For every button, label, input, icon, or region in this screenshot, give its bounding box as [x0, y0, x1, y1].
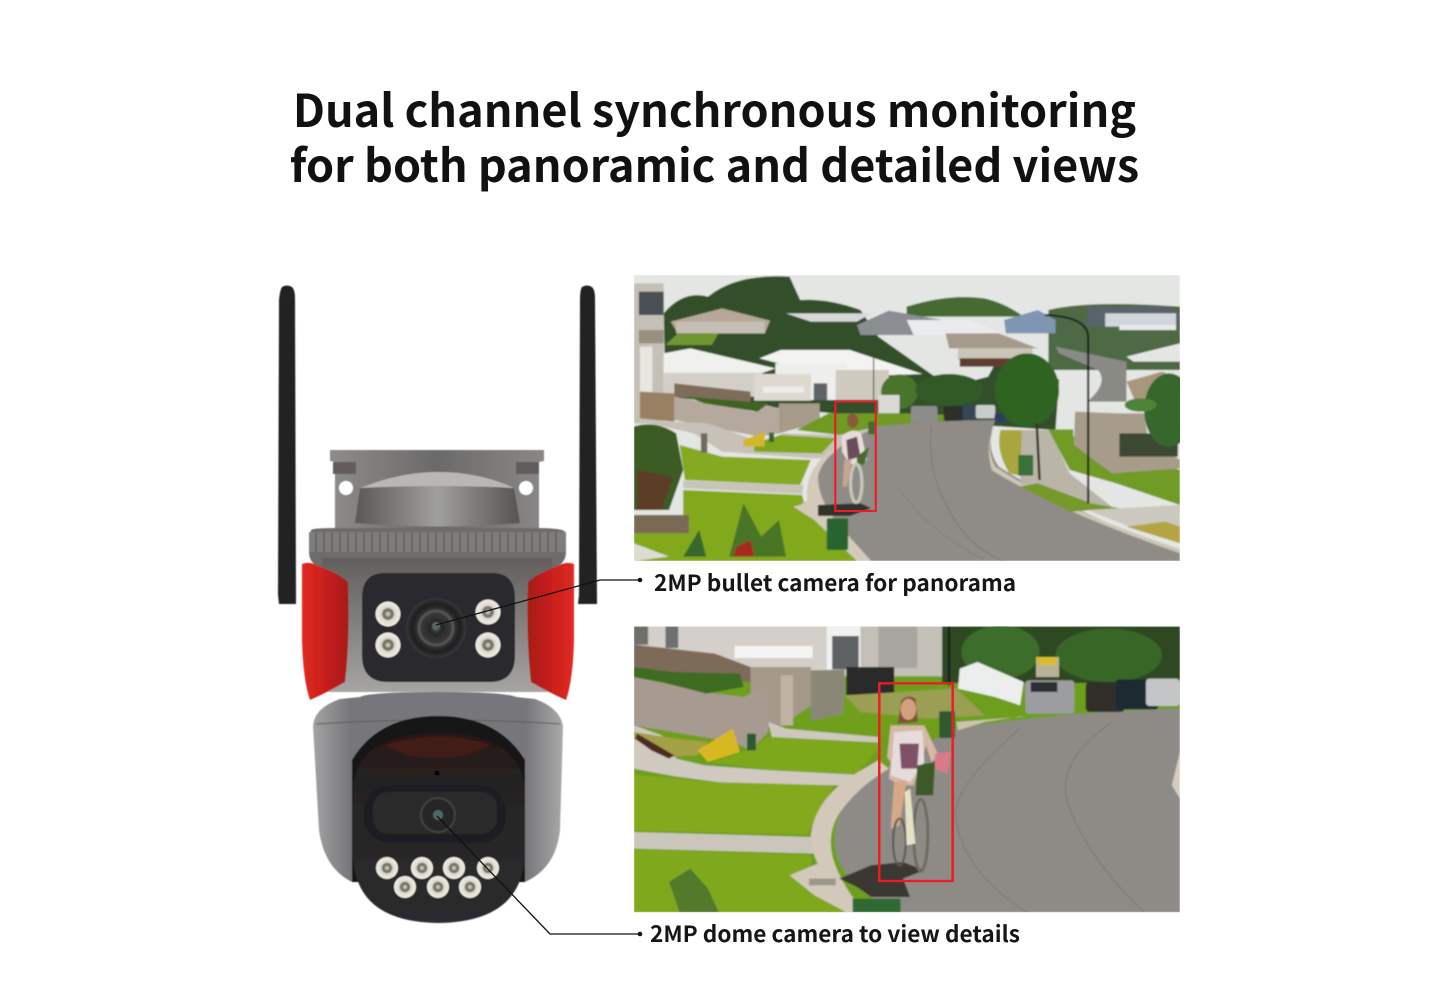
photo: panorama street view [634, 275, 1194, 561]
camera illustration [278, 286, 597, 923]
detection box [879, 683, 953, 881]
brown fence [634, 645, 751, 682]
cars [878, 395, 1006, 423]
bullet camera module [362, 573, 515, 682]
antenna: left [278, 286, 296, 604]
distant hills and trees [907, 297, 1024, 317]
street lamp [1045, 315, 1088, 503]
upper housing [322, 558, 552, 692]
mounting bracket [330, 450, 544, 530]
kerb [793, 450, 871, 561]
mid trees [881, 374, 918, 409]
white van [958, 662, 1024, 705]
right fence [1074, 412, 1180, 473]
lens [421, 798, 455, 832]
photo: detail view [634, 625, 1180, 912]
kerb [790, 760, 889, 912]
lower left lawns and paths [634, 420, 878, 458]
bins [827, 518, 848, 550]
hill lawn mid [796, 412, 946, 436]
mid lawn [712, 737, 882, 774]
road [835, 709, 1180, 912]
ridged ring [309, 528, 566, 570]
bin [939, 711, 955, 738]
LED group [376, 857, 499, 898]
lens [406, 598, 466, 658]
drain and shadow [839, 862, 924, 897]
detection box [835, 402, 876, 511]
LED group [376, 600, 500, 658]
dome cap [355, 472, 520, 526]
title: for both panoramic and detailed views [290, 130, 1139, 195]
label: dome camera: 2MP dome camera to view details [650, 916, 1020, 949]
bushes [635, 734, 674, 759]
right lawns [998, 429, 1023, 476]
far houses [671, 308, 770, 333]
background lawn [842, 697, 846, 715]
road [814, 420, 1180, 561]
foreground plants [634, 424, 683, 510]
title [290, 75, 1139, 195]
white houses [664, 348, 775, 373]
dark gap [352, 716, 525, 882]
retaining wall [634, 677, 768, 750]
left building [634, 283, 664, 423]
cyclist [887, 697, 951, 871]
trees [962, 625, 1040, 679]
dome camera head [353, 733, 525, 923]
rider shadow [818, 503, 871, 516]
cyclist [842, 413, 869, 503]
antenna: right [578, 286, 597, 604]
callout line: bullet camera [436, 578, 642, 625]
lower housing [313, 692, 563, 882]
street tree [995, 353, 1059, 427]
fences and walls [640, 392, 674, 422]
flowers [743, 432, 765, 447]
pole [947, 626, 951, 686]
foreground bin and plant [853, 899, 901, 912]
title: Dual channel synchronous monitoring [293, 75, 1136, 140]
label: bullet camera: 2MP bullet camera for panorama [654, 565, 1016, 598]
callout line: dome camera [437, 816, 642, 936]
red side guard: right [527, 563, 574, 700]
lens window [364, 785, 506, 843]
cars [1025, 679, 1180, 714]
red side guard: left [302, 563, 349, 700]
house wall [634, 626, 861, 676]
